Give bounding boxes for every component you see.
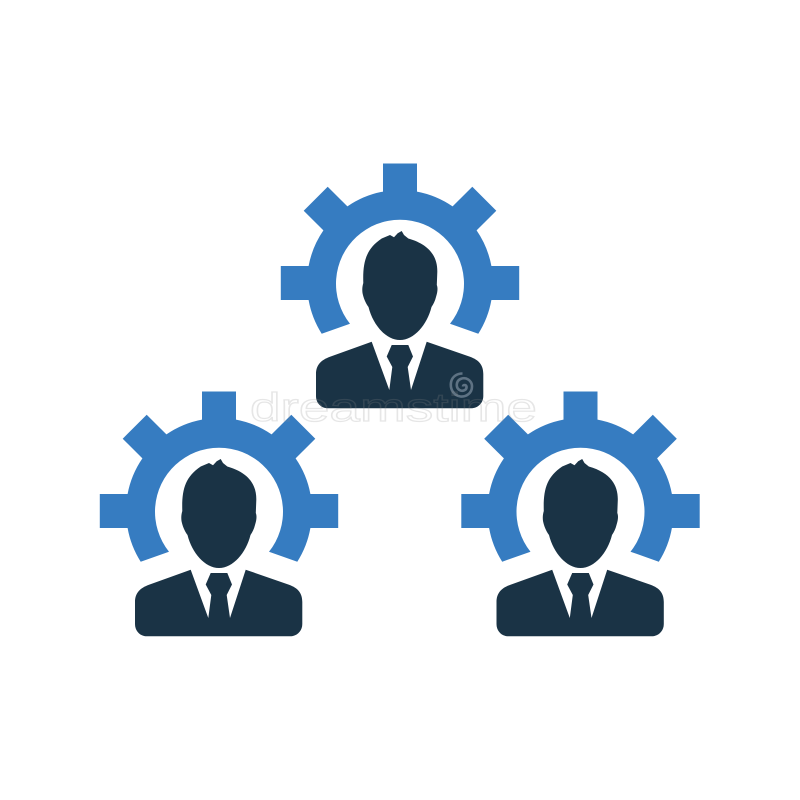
head: bottom-right: [543, 459, 618, 568]
watermark: text: dreamstime: [250, 386, 537, 430]
icon: top person with gear: [281, 164, 519, 408]
gear: bottom-left: [100, 392, 338, 562]
body: top: [316, 342, 483, 408]
icon: bottom-left person with gear: [100, 392, 338, 636]
icon: bottom-right person with gear: [461, 392, 700, 636]
head: bottom-left: [181, 459, 256, 568]
body: bottom-left: [135, 570, 302, 636]
watermark: spiral logo: [451, 374, 472, 397]
gear: bottom-right: [461, 392, 700, 562]
gear: top: [281, 164, 519, 334]
body: bottom-right: [496, 570, 664, 636]
head: top: [362, 231, 437, 340]
